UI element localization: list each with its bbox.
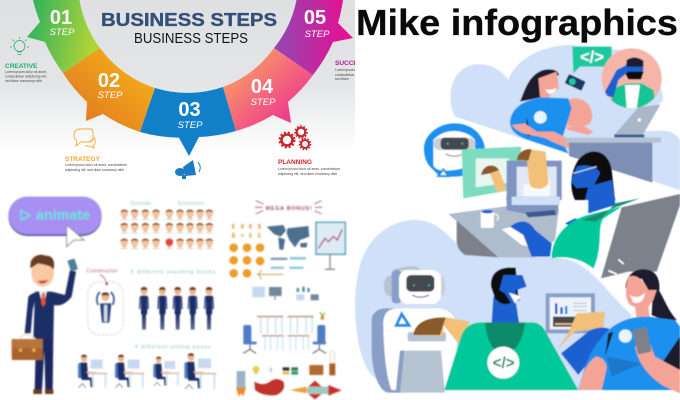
cloud background: [450, 45, 680, 190]
step 04 segment: STEP: [251, 97, 276, 108]
step 05 segment: STEP: [305, 29, 330, 40]
green document panel: [462, 147, 521, 198]
illustration: top half team scene: [424, 45, 680, 200]
text: creative: Lorem ipsum dolor sit amet,: [5, 70, 47, 74]
step 03 segment: STEP: [178, 120, 203, 131]
panel: business steps infographic: [0, 0, 367, 190]
text: creative: [5, 63, 47, 83]
step 02 segment: STEP: [98, 90, 123, 101]
text: strategy: adipiscing elit, sed diam nonummy nibh: [65, 168, 124, 172]
currency and coins: €: [232, 223, 236, 230]
step 05 segment: 05: [304, 7, 326, 29]
orange paper: [557, 312, 605, 350]
icon: gears: [280, 126, 311, 150]
currency and coins: €: [249, 223, 253, 230]
heading: standing poses: 5 different standing poses: [131, 269, 215, 275]
man at desk head: [571, 152, 615, 200]
monitor and paper: [507, 149, 562, 200]
animate button: [8, 197, 102, 236]
sitting poses: [78, 353, 216, 389]
text: planning: PLANNING: [278, 159, 312, 166]
currency and coins: £: [249, 232, 253, 239]
text: strategy: STRATEGY: [65, 156, 101, 163]
currency and coins: [229, 223, 283, 279]
hand reaching: [561, 328, 610, 375]
grid of faces: [121, 209, 213, 249]
rocket parts: [236, 371, 342, 399]
step 03 segment: [140, 87, 236, 156]
main character: [12, 255, 78, 394]
text: planning: Lorem ipsum dolor sit amet, consectetuer: [278, 167, 341, 171]
animate button: animate: [36, 207, 90, 222]
portrait: man with phone: [602, 48, 662, 108]
step 05 segment: [274, 0, 353, 75]
heading: Mike infographics: Mike infographics: [356, 2, 678, 43]
robot chat icon: [424, 123, 485, 177]
step 04 segment: [223, 48, 313, 131]
step 03 segment: 03: [178, 99, 201, 121]
icon: light bulb: [10, 37, 29, 54]
heading: sounds and emotions: Sounds: [130, 201, 151, 207]
constructor figure: [86, 269, 123, 335]
title: [101, 9, 277, 47]
text: strategy: [65, 156, 128, 172]
text: success: SUCCESS: [335, 60, 367, 67]
constructor figure: Constructor: [86, 269, 118, 275]
panel: animate character kit: [8, 197, 345, 399]
text: creative: sed diam nonummy nibh: [5, 79, 42, 83]
desk with mug: [448, 197, 560, 257]
text: success: sed diam: [335, 77, 349, 81]
mega bonus heading: MEGA BONUS!: [266, 206, 312, 212]
robot: [372, 266, 470, 393]
title: BUSINESS STEPS: [101, 9, 277, 30]
currency and coins: $: [232, 232, 236, 239]
world map: [267, 225, 309, 250]
man at desk: arms and jacket: [510, 198, 640, 268]
small labels: [271, 257, 306, 269]
woman with phone: [578, 269, 680, 393]
currency and coins: £: [258, 232, 262, 239]
title: BUSINESS STEPS: [134, 31, 248, 47]
code speech bubble: </>: [580, 48, 604, 67]
icon: megaphone: [175, 160, 200, 179]
office monitors: [252, 287, 319, 300]
chart board: [316, 222, 345, 269]
text: creative: consectetuer adipiscing elit,: [5, 74, 47, 78]
accessories: [253, 351, 335, 375]
office desks: [257, 316, 314, 350]
text: creative: CREATIVE: [5, 63, 38, 70]
step 01 segment: STEP: [50, 27, 75, 38]
cloud background: [355, 220, 632, 390]
text: success: consectetuer: [335, 73, 355, 77]
laptop and desk: [565, 105, 661, 183]
text: success: [335, 60, 367, 81]
man in green with code logo: [444, 268, 578, 390]
step 01 segment: 01: [50, 7, 72, 29]
step 04 segment: 04: [251, 76, 274, 98]
heading: sounds and emotions: [130, 201, 204, 207]
step 02 segment: [63, 48, 155, 132]
text: planning: [278, 159, 341, 176]
illustration: bottom half team scene: [355, 194, 680, 393]
currency and coins: $: [258, 223, 262, 230]
office chairs: [243, 325, 326, 353]
step 01 segment: [27, 0, 100, 73]
heading: sitting poses: 4 different sitting poses: [135, 344, 211, 350]
text: planning: adipiscing elit, sed diam nonummy nibh: [278, 172, 337, 176]
mega bonus heading: [255, 201, 322, 214]
currency and coins: ¥: [241, 223, 245, 230]
currency and coins: +: [240, 232, 244, 239]
step 02 segment: 02: [98, 70, 120, 92]
man in green with code logo: </>: [493, 355, 515, 372]
standing poses: [139, 287, 214, 330]
text: success: Lorem ipsum: [335, 68, 355, 72]
gray wall panel: [601, 194, 680, 287]
code speech bubble: [572, 47, 612, 73]
heading: sounds and emotions: Emotions: [178, 201, 204, 207]
woman with card: [510, 69, 593, 153]
icon: cursor: [67, 225, 84, 247]
plant: [320, 312, 325, 320]
icon: speech bubbles: [74, 129, 95, 148]
text: strategy: Lorem ipsum dolor sit amet, consectetuer: [65, 163, 128, 167]
dashboard board: [546, 293, 595, 333]
